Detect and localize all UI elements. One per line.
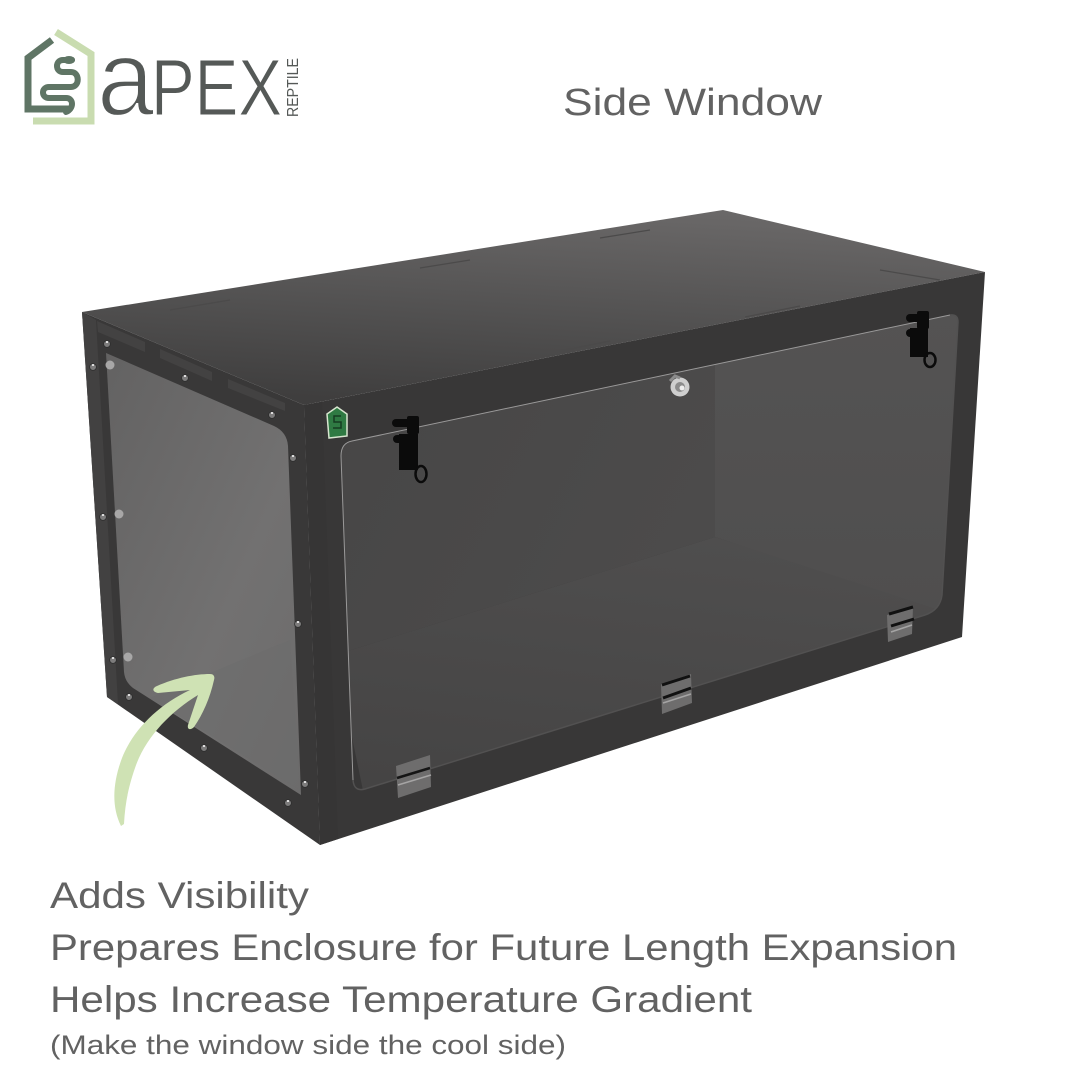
enclosure illustration — [82, 210, 985, 845]
note: (Make the window side the cool side) — [50, 1030, 566, 1060]
lock — [670, 376, 690, 396]
benefit: temperature gradient: Helps Increase Temperature Gradient — [50, 979, 753, 1020]
right black latch — [906, 311, 936, 367]
window highlight edge — [341, 315, 950, 780]
top panel joint tabs — [97, 230, 940, 411]
icon: house outline with snake — [28, 32, 91, 121]
benefit: expansion: Prepares Enclosure for Future Length Expansion — [50, 927, 957, 968]
icon: green logo badge — [327, 407, 347, 438]
enclosure right back wall — [715, 310, 965, 620]
side window floor reflection — [150, 640, 300, 790]
logo wordmark: a — [97, 19, 154, 139]
logo wordmark — [97, 19, 282, 139]
bottom clip right — [887, 607, 914, 642]
logo word: reptile: REPTILE — [285, 58, 302, 117]
enclosure floor — [348, 537, 934, 788]
benefit: visibility: Adds Visibility — [50, 875, 310, 916]
front acrylic window — [335, 310, 965, 800]
logo wordmark: PEX — [151, 43, 282, 132]
bottom clip left — [396, 755, 431, 798]
logo: Apex Reptile — [28, 19, 302, 139]
bottom clip middle — [661, 674, 692, 714]
benefits text block — [50, 875, 957, 1060]
left side frame — [82, 312, 320, 845]
arrow pointing at side window — [114, 674, 214, 826]
enclosure left back wall — [335, 360, 715, 655]
screws — [90, 341, 308, 806]
corner post — [304, 402, 338, 845]
top panel — [82, 210, 985, 405]
left black latch — [392, 416, 426, 482]
title: Side Window — [563, 82, 823, 124]
window lower edge — [353, 315, 958, 790]
left frame outer strip — [82, 312, 118, 704]
front frame — [304, 272, 985, 845]
side window pane — [106, 353, 301, 795]
